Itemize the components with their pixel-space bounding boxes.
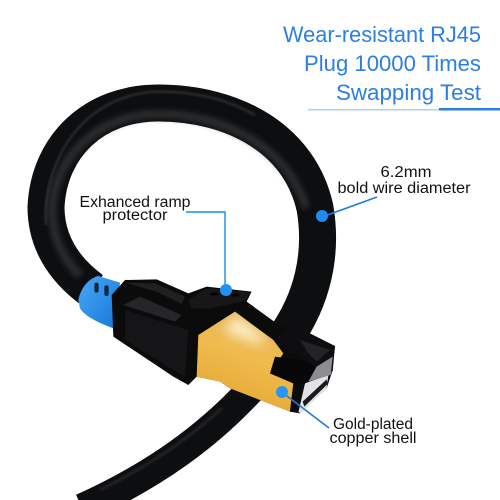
contact teeth bbox=[303, 379, 328, 407]
callout: gold-plated shell: copper shell bbox=[330, 430, 416, 447]
white contact strip bbox=[295, 375, 328, 413]
callout: ramp protector: protector bbox=[102, 207, 168, 224]
heading bbox=[283, 22, 482, 105]
latch clip bbox=[273, 325, 335, 372]
callout: gold-plated shell bbox=[276, 386, 416, 447]
blue strain relief boot bbox=[78, 276, 120, 328]
callout: gold-plated shell: Gold-plated bbox=[333, 416, 413, 433]
gold shell bbox=[197, 312, 293, 412]
RJ45 plug bbox=[78, 276, 335, 413]
black plug body bbox=[112, 279, 335, 413]
body highlights bbox=[125, 310, 188, 377]
callout: ramp protector bbox=[80, 194, 232, 296]
boot slots bbox=[94, 283, 109, 296]
heading: Wear-resistant RJ45 bbox=[283, 22, 481, 47]
heading underline bbox=[308, 108, 500, 110]
callout: wire diameter bbox=[316, 164, 470, 222]
callout: ramp protector: Exhanced ramp bbox=[80, 194, 190, 211]
lower cable bbox=[82, 385, 255, 500]
callout: wire diameter: bold wire diameter bbox=[338, 180, 470, 197]
heading: Swapping Test bbox=[336, 80, 482, 105]
callout: wire diameter: 6.2mm bbox=[380, 164, 432, 181]
cable loop bbox=[46, 92, 318, 338]
gold highlight bbox=[223, 317, 267, 343]
ramp protector bbox=[188, 288, 251, 308]
heading: Plug 10000 Times bbox=[304, 51, 481, 76]
